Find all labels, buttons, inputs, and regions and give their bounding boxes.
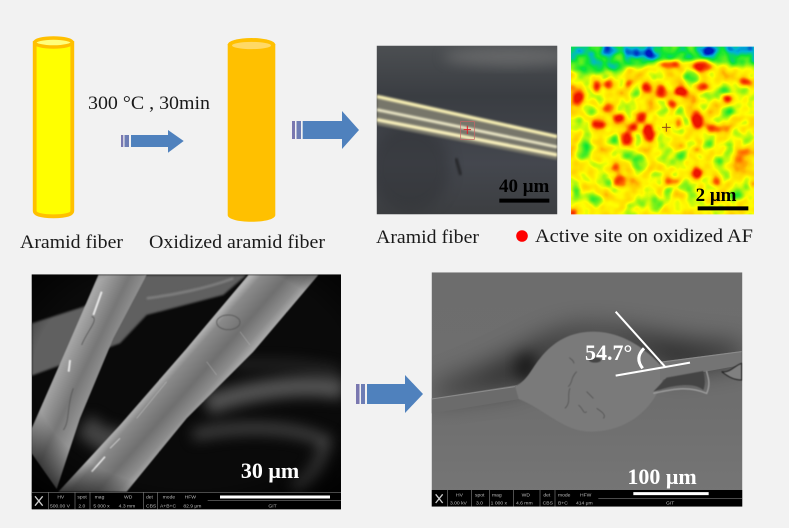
SEM image: droplet on fiber with contact angle: 414 μm	[576, 501, 593, 507]
label: aramid fiber: Aramid fiber	[20, 232, 124, 253]
SEM image: droplet on fiber with contact angle	[432, 272, 742, 507]
SEM image: droplet on fiber with contact angle: CBS	[543, 501, 554, 507]
orange cylinder: oxidized aramid fiber	[228, 38, 275, 222]
SEM image: oxidized aramid fibers: mag	[95, 494, 105, 500]
SEM image: droplet on fiber with contact angle: HFW	[580, 492, 592, 498]
scale label: 30 µm: 30 μm	[241, 458, 299, 483]
SEM image: droplet on fiber with contact angle: spot	[475, 492, 485, 498]
SEM image: droplet on fiber with contact angle: 3.00 kV	[450, 501, 468, 507]
SEM image: droplet on fiber with contact angle: 4.6 mm	[516, 501, 533, 507]
label: oxidized aramid fiber: Oxidized aramid fiber	[149, 232, 326, 253]
SEM image: oxidized aramid fibers: 82.9 μm	[183, 503, 201, 509]
SEM image: oxidized aramid fibers: 4.3 mm	[119, 503, 135, 509]
SEM image: oxidized aramid fibers: GIT	[268, 503, 277, 509]
SEM image: oxidized aramid fibers	[32, 274, 343, 509]
SEM image: droplet on fiber with contact angle: B+C	[558, 501, 568, 507]
SEM image: oxidized aramid fibers: det	[146, 494, 154, 500]
heat map of active sites	[571, 46, 754, 214]
SEM image: oxidized aramid fibers: CBS	[146, 503, 157, 509]
treatment condition label: 300 °C , 30min	[88, 93, 211, 114]
yellow cylinder: aramid fiber	[35, 38, 72, 216]
SEM image: droplet on fiber with contact angle: WD	[522, 492, 530, 498]
arrow: to wetting result	[356, 375, 423, 413]
SEM image: droplet on fiber with contact angle: det	[543, 492, 551, 498]
arrow: to characterization	[292, 111, 359, 149]
SEM image: droplet on fiber with contact angle: mode	[558, 492, 571, 498]
legend: active site on oxidized AF: Active site on oxidized AF	[535, 226, 753, 247]
SEM image: oxidized aramid fibers: A+B+C	[160, 503, 176, 509]
SEM image: droplet on fiber with contact angle: 3.0	[476, 501, 483, 507]
SEM image: oxidized aramid fibers: HV	[57, 494, 65, 500]
arrow: oxidation step	[121, 130, 184, 153]
SEM image: oxidized aramid fibers: HFW	[185, 494, 196, 500]
scale label: 40 µm: 40 μm	[499, 176, 550, 197]
SEM image: droplet on fiber with contact angle: HV	[456, 492, 464, 498]
SEM image: oxidized aramid fibers: WD	[124, 494, 133, 500]
SEM image: oxidized aramid fibers: 2.0	[78, 503, 85, 509]
SEM image: oxidized aramid fibers: mode	[163, 494, 175, 500]
SEM image: oxidized aramid fibers: spot	[77, 494, 87, 500]
SEM image: oxidized aramid fibers: 500.00 V	[50, 503, 71, 509]
SEM image: droplet on fiber with contact angle: 1 000 x	[491, 501, 508, 507]
SEM image: droplet on fiber with contact angle: mag	[492, 492, 502, 498]
angle label: 54.7°: 54.7°	[585, 340, 632, 365]
optical micrograph of aramid fiber	[376, 46, 558, 214]
scale label: 100 µm: 100 μm	[627, 464, 697, 489]
SEM image: oxidized aramid fibers: 5 000 x	[93, 503, 110, 509]
label: aramid fiber: Aramid fiber	[376, 227, 480, 248]
SEM image: droplet on fiber with contact angle: GIT	[666, 501, 674, 507]
scale label: 2 µm: 2 μm	[696, 185, 737, 206]
